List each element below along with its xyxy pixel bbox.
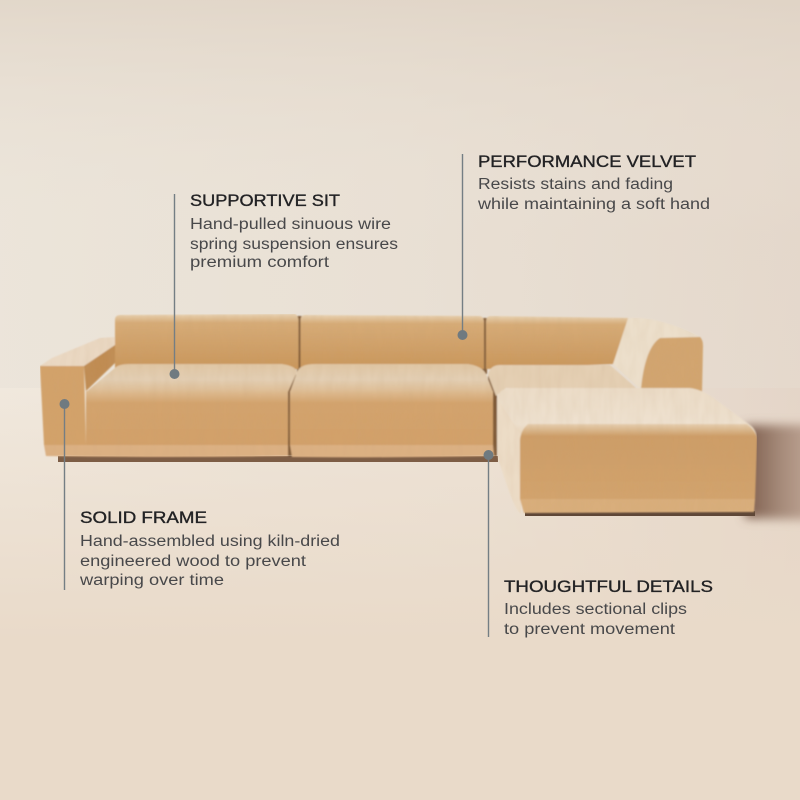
description: Hand-pulled sinuous wire	[190, 216, 391, 233]
floor shadow	[58, 425, 800, 520]
description: premium comfort	[190, 254, 330, 271]
description: to prevent movement	[504, 621, 676, 638]
sofa illustration	[40, 314, 757, 514]
leader line and dot	[458, 154, 468, 340]
description	[190, 216, 398, 271]
dark gaps between modules	[286, 316, 497, 456]
heading: PERFORMANCE VELVET	[478, 152, 696, 171]
leader line and dot	[484, 450, 494, 637]
description: engineered wood to prevent	[80, 553, 307, 570]
description: warping over time	[79, 572, 224, 589]
description: Resists stains and fading	[478, 176, 673, 193]
callout: solid frame	[60, 399, 340, 590]
back cushion left	[115, 314, 299, 369]
seat left	[44, 364, 297, 457]
back cushion right	[486, 316, 630, 369]
seat centre	[290, 364, 494, 457]
seat right	[488, 365, 636, 396]
heading: THOUGHTFUL DETAILS	[504, 577, 713, 596]
description	[504, 601, 687, 638]
heading: SOLID FRAME	[80, 508, 207, 527]
callout: thoughtful details	[484, 450, 713, 638]
back cushion centre	[300, 315, 484, 369]
description: while maintaining a soft hand	[477, 196, 710, 213]
leader line and dot	[170, 194, 180, 379]
right arm	[613, 318, 703, 392]
callout: performance velvet	[458, 152, 710, 340]
description	[477, 176, 710, 213]
description: spring suspension ensures	[190, 236, 398, 253]
heading: SUPPORTIVE SIT	[190, 191, 340, 210]
leader line and dot	[60, 399, 70, 590]
ottoman	[497, 388, 757, 514]
left arm	[40, 337, 115, 445]
description: Includes sectional clips	[504, 601, 687, 618]
description	[79, 533, 340, 589]
callout: supportive sit	[170, 191, 398, 379]
description: Hand-assembled using kiln-dried	[80, 533, 340, 550]
